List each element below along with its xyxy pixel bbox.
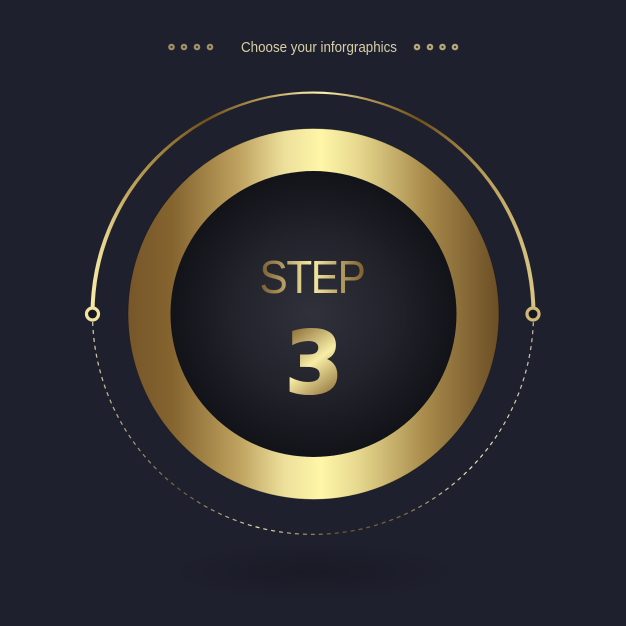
dots left [169,45,212,49]
dots right [415,45,457,49]
header: choose your infographics [169,40,457,56]
right node [527,308,539,320]
ground shadow [163,542,463,602]
step label: STEP [260,252,364,303]
left node [86,308,98,320]
header text: Choose your inforgraphics [241,40,397,56]
inner dark disc [170,171,456,457]
step number: 3 [285,314,343,414]
gold ring [128,128,499,500]
upper gold arc [90,91,536,314]
dashed lower arc [93,322,533,534]
